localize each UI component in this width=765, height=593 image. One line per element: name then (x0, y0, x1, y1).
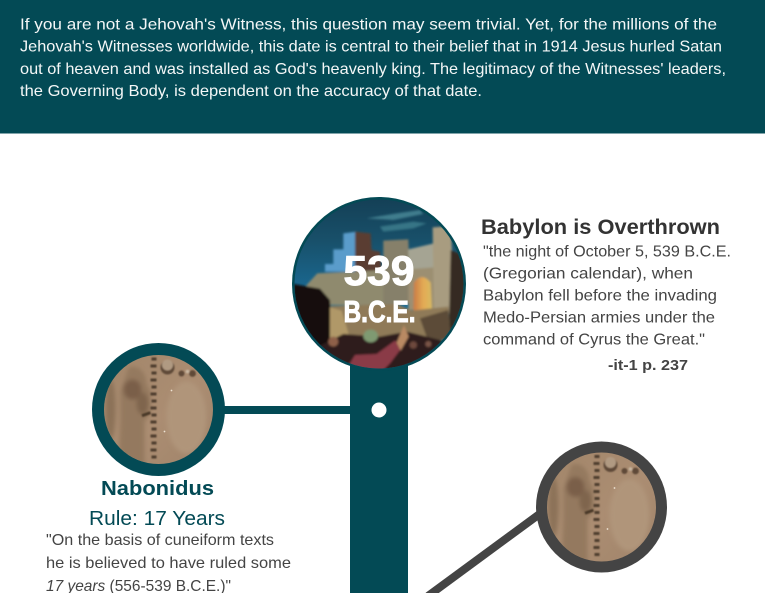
circle label 539: 539 (344, 247, 414, 294)
quote: Nabonidus rule (46, 532, 291, 593)
tablet image (102, 354, 214, 466)
illustration: Babylon city (294, 200, 464, 368)
heading: Babylon is Overthrown: Babylon is Overthrown (481, 215, 720, 239)
ziggurat (325, 232, 357, 272)
quote: Nabonidus rule: "On the basis of cuneiform texts (46, 532, 274, 549)
horizontal connector to Nabonidus (215, 406, 351, 414)
heading: Nabonidus: Nabonidus (101, 478, 214, 500)
subheading: Rule 17 Years: Rule: 17 Years (89, 507, 225, 530)
quote: fall of Babylon: Medo-Persian armies under the (483, 310, 715, 326)
timeline dot (372, 402, 386, 418)
lower wall (330, 304, 451, 342)
quote: fall of Babylon: Babylon fell before the invading (483, 288, 717, 304)
circle label B.C.E.: B.C.E. (344, 294, 416, 329)
far wall (307, 270, 385, 305)
header intro text: out of heaven and was installed as God's heavenly king. The legitimacy of the Witnesses' leaders, (20, 61, 726, 78)
header intro text (20, 16, 726, 100)
header banner (0, 0, 765, 134)
quote: fall of Babylon: "the night of October 5, 539 B.C.E. (483, 244, 731, 260)
quote: fall of Babylon (483, 244, 731, 348)
left circle: Nabonidus tablet (92, 343, 225, 476)
quote: fall of Babylon: command of Cyrus the Great." (483, 332, 705, 348)
citation: -it-1 p. 237 (608, 357, 688, 374)
main circle: 539 B.C.E. (290, 197, 470, 373)
right circle: tablet (536, 442, 667, 572)
crowd (320, 331, 442, 368)
quote: Nabonidus rule: he is believed to have ruled some (46, 555, 291, 572)
header intro text: the Governing Body, is dependent on the accuracy of that date. (20, 83, 482, 100)
header intro text: If you are not a Jehovah's Witness, this question may seem trivial. Yet, for the millions of the (20, 16, 717, 34)
diagonal connector line to right circle (428, 510, 545, 593)
tablet image (546, 451, 658, 563)
header intro text: Jehovah's Witnesses worldwide, this date is central to their belief that in 1914 Jesus hurled Satan (20, 38, 722, 56)
timeline trunk (350, 365, 408, 593)
quote: fall of Babylon: (Gregorian calendar), when (483, 266, 693, 282)
